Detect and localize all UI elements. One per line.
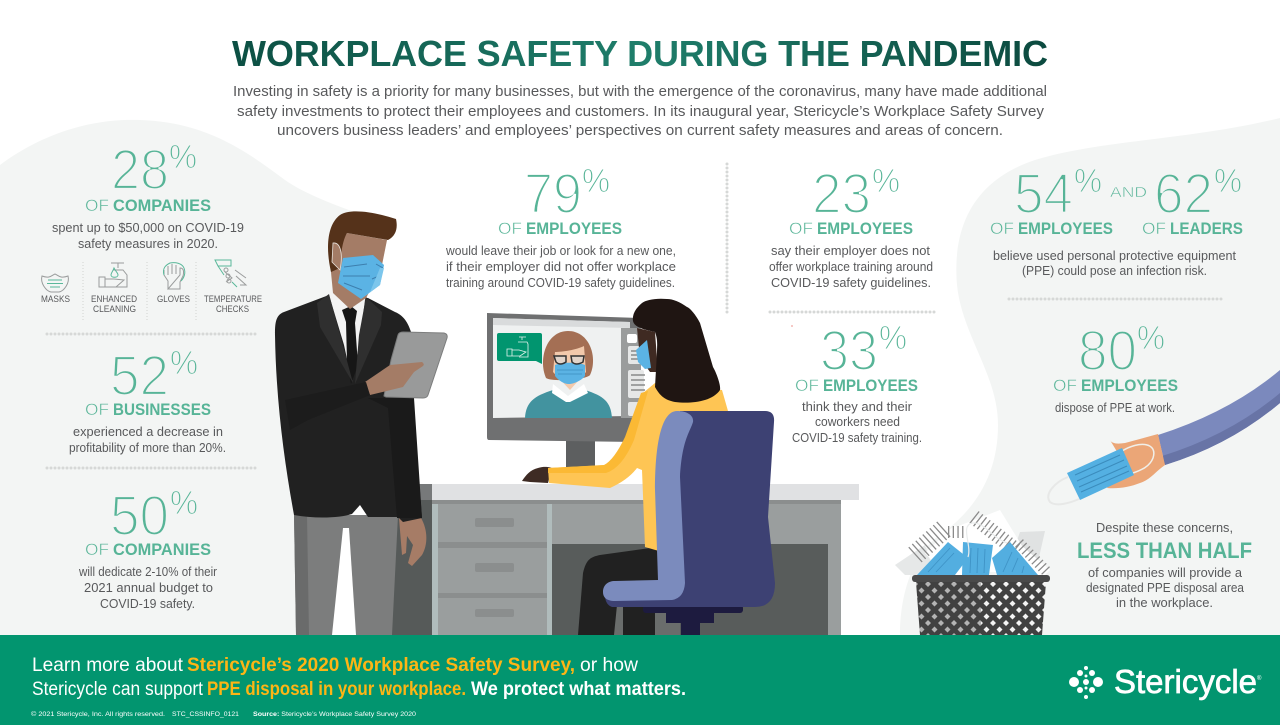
stat: 54% and 62%: OF: [1142, 219, 1166, 238]
stat: 79% of employees: OF: [498, 219, 522, 238]
illustration: desk: [390, 484, 859, 635]
ear loop: [332, 243, 341, 270]
woman's hair: [633, 299, 720, 403]
stat: 23% of employees: OF: [789, 219, 813, 238]
stat: 28% of companies: safety measures in 2020.: [78, 237, 218, 251]
footer legal text: Source: Stericycle’s Workplace Safety Survey 2020: [253, 711, 416, 718]
stat: 52% of businesses: experienced a decrease in: [73, 425, 223, 439]
icon: temperature checks: [204, 260, 262, 314]
footer legal text: © 2021 Stericycle, Inc. All rights reserved.: [31, 710, 165, 718]
stat: 54% and 62%: (PPE) could pose an infection risk.: [1022, 264, 1207, 278]
stat: 54% and 62%: 54: [1014, 162, 1073, 226]
stat: 54% and 62%: %: [1074, 162, 1102, 199]
hanging hand: [399, 518, 426, 566]
illustration: hand holding mask: [1048, 370, 1280, 504]
stat: 28% of companies: spent up to $50,000 on COVID-19: [52, 221, 244, 235]
illustration: office chair: [603, 411, 775, 635]
illustration: seated woman: [522, 299, 728, 635]
intro paragraph: [233, 83, 1047, 139]
icon: masks: [41, 274, 70, 304]
callout: less than half: [1077, 521, 1252, 610]
stat: 80% of employees: OF: [1053, 376, 1077, 395]
icon: masks: MASKS: [41, 294, 70, 304]
stat: 79% of employees: 79: [524, 162, 582, 226]
footer band: [0, 635, 1280, 725]
speech bubble with soap icon: [497, 333, 542, 364]
intro paragraph: uncovers business leaders’ and employees’ perspectives on current safety measures and areas of concern.: [277, 122, 1003, 139]
stat: 23% of employees: EMPLOYEES: [817, 219, 913, 238]
stat: 80% of employees: 80: [1078, 319, 1137, 383]
illustration: waste basket with masks and papers: [895, 510, 1050, 635]
footer call to action: We protect what matters.: [471, 679, 686, 700]
stat: 79% of employees: would leave their job or look for a new one,: [445, 244, 676, 258]
callout: less than half: of companies will provide a: [1088, 566, 1242, 580]
stat: 54% and 62%: 62: [1154, 162, 1213, 226]
stat: 50% of companies: 2021 annual budget to: [84, 581, 213, 595]
callout: less than half: in the workplace.: [1116, 596, 1213, 610]
stat: 79% of employees: %: [582, 162, 610, 199]
stat: 79% of employees: EMPLOYEES: [526, 219, 622, 238]
callout: less than half: Despite these concerns,: [1096, 521, 1233, 535]
stat: 54% and 62%: EMPLOYEES: [1018, 219, 1113, 238]
stat: 33% of employees: OF: [795, 376, 819, 395]
stat: 79% of employees: training around COVID-19 safety guidelines.: [446, 276, 675, 290]
stat: 54% and 62%: OF: [990, 219, 1014, 238]
hand on tablet: [365, 362, 424, 395]
panel: right background blob: [900, 118, 1280, 635]
stat: 33% of employees: coworkers need: [815, 415, 900, 429]
panel: left background blob: [0, 120, 360, 635]
footer call to action: PPE disposal in your workplace.: [207, 679, 466, 700]
footer call to action: Learn more about: [32, 655, 184, 676]
stat: 50% of companies: [78, 484, 217, 611]
illustration: standing man: [275, 211, 447, 635]
stat: 52% of businesses: OF: [85, 400, 109, 419]
stat: 50% of companies: COMPANIES: [113, 540, 211, 559]
footer call to action: or how: [580, 655, 638, 676]
stat: 33% of employees: [792, 319, 922, 445]
stat: 33% of employees: COVID-19 safety training.: [792, 431, 922, 445]
stat: 79% of employees: [445, 162, 676, 290]
stat: 54% and 62%: believe used personal protective equipment: [993, 249, 1237, 263]
sleeve fold: [285, 382, 370, 430]
stat: 80% of employees: %: [1137, 319, 1165, 356]
neck and head: [330, 233, 387, 309]
logo: Stericycle: Stericycle: [1114, 663, 1257, 700]
stat: 33% of employees: 33: [820, 319, 878, 383]
stat: 23% of employees: 23: [812, 162, 871, 226]
stat: 80% of employees: dispose of PPE at work.: [1055, 401, 1175, 415]
footer call to action: [32, 655, 686, 700]
stat: 28% of companies: COMPANIES: [113, 196, 211, 215]
stat: 79% of employees: if their employer did not offer workplace: [446, 260, 676, 274]
stat: 80% of employees: [1053, 319, 1178, 415]
jacket: [275, 295, 422, 522]
stat: 33% of employees: %: [879, 319, 907, 356]
icon: gloves: [157, 263, 190, 304]
icon: enhanced cleaning: ENHANCED: [91, 294, 137, 304]
footer legal text: [31, 710, 416, 718]
callout: less than half: LESS THAN HALF: [1077, 538, 1252, 563]
logo: Stericycle: ®: [1257, 675, 1262, 682]
stat: 28% of companies: %: [169, 138, 197, 175]
stat: 23% of employees: say their employer does not: [771, 244, 931, 258]
footer call to action: Stericycle can support: [32, 679, 204, 700]
stat: 50% of companies: OF: [85, 540, 109, 559]
footer call to action: Stericycle’s 2020 Workplace Safety Survey,: [187, 655, 575, 676]
intro paragraph: safety investments to protect their employees and customers. In its inaugural year, Stericycle’s Workplace Safety Survey: [237, 103, 1044, 120]
intro paragraph: Investing in safety is a priority for many businesses, but with the emergence of the coronavirus, many have made additional: [233, 83, 1047, 100]
video call woman: [525, 331, 612, 418]
illustration: computer monitor: [487, 313, 645, 468]
stat: 80% of employees: EMPLOYEES: [1081, 376, 1178, 395]
stat: 52% of businesses: 52: [110, 344, 169, 408]
stat: 52% of businesses: [69, 344, 226, 455]
stat: 54% and 62%: [990, 162, 1243, 278]
icon: temperature checks: TEMPERATURE: [204, 294, 262, 304]
stat: 52% of businesses: profitability of more than 20%.: [69, 441, 226, 455]
shirt and tie: [329, 285, 368, 382]
stat: 23% of employees: [769, 162, 933, 290]
stat: 23% of employees: offer workplace training around: [769, 260, 933, 274]
stat: 33% of employees: think they and their: [802, 400, 912, 414]
stat: 23% of employees: COVID-19 safety guidelines.: [771, 276, 931, 290]
stat: 54% and 62%: LEADERS: [1170, 219, 1243, 238]
stat: 54% and 62%: AND: [1110, 184, 1147, 201]
icon: gloves: GLOVES: [157, 294, 190, 304]
woman's mask: [636, 340, 651, 369]
hair: [328, 211, 397, 272]
stat: 52% of businesses: BUSINESSES: [113, 400, 211, 419]
tablet: [384, 332, 447, 398]
stat: 23% of employees: %: [872, 162, 900, 199]
stat: 28% of companies: OF: [85, 196, 109, 215]
icon: enhanced cleaning: CLEANING: [93, 304, 136, 314]
title: WORKPLACE SAFETY DURING THE PANDEMIC: [232, 33, 1048, 74]
stat: 50% of companies: 50: [110, 484, 169, 548]
icon: temperature checks: CHECKS: [216, 304, 249, 314]
stat: 54% and 62%: %: [1214, 162, 1242, 199]
footer legal text: STC_CSSINFO_0121: [172, 711, 239, 718]
stat: 28% of companies: [52, 138, 244, 251]
stat: 52% of businesses: %: [170, 344, 198, 381]
stat: 50% of companies: will dedicate 2-10% of their: [78, 565, 217, 579]
face: [637, 328, 658, 372]
stat: 50% of companies: COVID-19 safety.: [100, 597, 195, 611]
callout: less than half: designated PPE disposal area: [1086, 581, 1244, 595]
face mask: [338, 255, 384, 299]
trousers: [294, 515, 398, 635]
icon: enhanced cleaning: [91, 263, 137, 314]
stat: 28% of companies: 28: [111, 138, 169, 202]
stat: 33% of employees: EMPLOYEES: [823, 376, 918, 395]
stat: 50% of companies: %: [170, 484, 198, 521]
